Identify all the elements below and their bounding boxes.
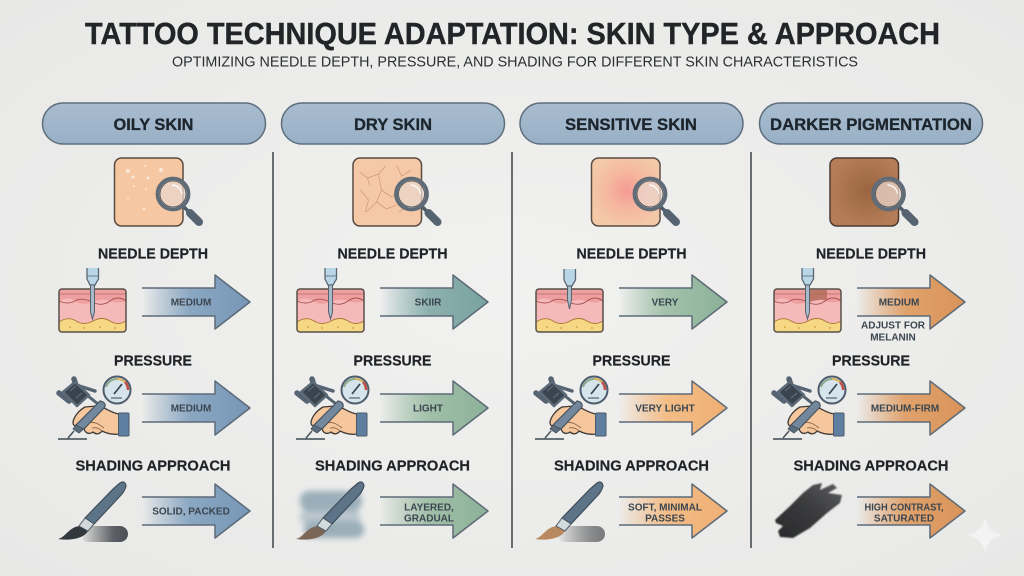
- icon: dry cracked skin under magnifier: [353, 158, 438, 226]
- arrow: medium depth: [857, 275, 965, 329]
- arrow: high contrast saturated: [857, 484, 965, 538]
- icon: brush with light swath: [535, 482, 605, 542]
- icon: dark skin under magnifier: [830, 158, 914, 226]
- arrow: soft minimal passes: SOFT, MINIMAL: [628, 502, 702, 514]
- icon: reddened skin under magnifier: [592, 158, 676, 226]
- note: adjust for melanin: [861, 320, 926, 344]
- arrow: solid packed: SOLID, PACKED: [152, 506, 230, 518]
- note: adjust for melanin: MELANIN: [870, 332, 916, 344]
- icon: oily skin under magnifier: [114, 158, 199, 226]
- icon: tattoo machine and gauge: [773, 376, 846, 439]
- arrow: skin depth: SKIIR: [415, 298, 442, 308]
- arrow: very shallow: [619, 275, 727, 329]
- panel: dry skin: [282, 103, 504, 540]
- icon: needle in skin: [59, 268, 126, 332]
- arrow: high contrast saturated: HIGH CONTRAST,: [864, 502, 944, 514]
- label: needle depth: NEEDLE DEPTH: [576, 246, 686, 262]
- label: pressure: PRESSURE: [592, 352, 670, 370]
- label: needle depth: NEEDLE DEPTH: [338, 246, 448, 262]
- heading: sensitive skin: [520, 103, 743, 144]
- arrow: medium depth: MEDIUM: [879, 298, 919, 308]
- arrow: light pressure: [380, 381, 488, 435]
- icon: brush with layered swath: [296, 482, 364, 540]
- label: needle depth: NEEDLE DEPTH: [816, 246, 926, 262]
- arrow: layered gradual: GRADUAL: [404, 514, 454, 524]
- icon: tattoo machine and gauge: [535, 376, 608, 439]
- icon: shallow needle in skin: [536, 269, 603, 332]
- heading: sensitive skin: SENSITIVE SKIN: [565, 115, 697, 134]
- label: needle depth: NEEDLE DEPTH: [98, 246, 208, 262]
- panel: oily skin: [42, 103, 266, 542]
- heading: dry skin: [282, 103, 504, 144]
- heading: darker pigmentation: DARKER PIGMENTATION: [770, 115, 972, 134]
- icon: sparkle watermark: [967, 517, 1003, 553]
- arrow: skin depth: [380, 275, 488, 329]
- label: pressure: PRESSURE: [354, 352, 432, 370]
- heading: oily skin: OILY SKIN: [114, 115, 194, 134]
- label: shading approach: SHADING APPROACH: [315, 458, 470, 474]
- arrow: high contrast saturated: SATURATED: [874, 514, 934, 524]
- label: shading approach: SHADING APPROACH: [76, 458, 230, 474]
- icon: needle in melanin-rich skin: [774, 268, 841, 332]
- label: shading approach: SHADING APPROACH: [554, 458, 709, 474]
- label: shading approach: SHADING APPROACH: [794, 458, 948, 474]
- arrow: very shallow: VERY: [652, 298, 679, 308]
- arrow: medium pressure: MEDIUM: [171, 404, 211, 414]
- arrow: medium depth: [142, 275, 250, 329]
- subtitle: OPTIMIZING NEEDLE DEPTH, PRESSURE, AND SHADING FOR DIFFERENT SKIN CHARACTERISTICS: [172, 54, 858, 70]
- heading: dry skin: DRY SKIN: [354, 115, 432, 134]
- heading: darker pigmentation: [760, 103, 982, 144]
- label: pressure: PRESSURE: [832, 352, 910, 370]
- icon: tattoo machine and gauge: [296, 376, 368, 439]
- arrow: soft minimal passes: PASSES: [645, 514, 685, 524]
- icon: black saturated stroke: [775, 483, 842, 538]
- arrow: medium depth: MEDIUM: [171, 298, 211, 308]
- label: pressure: PRESSURE: [114, 352, 192, 370]
- title: TATTOO TECHNIQUE ADAPTATION: SKIN TYPE & APPROACH: [85, 16, 940, 51]
- arrow: very light pressure: [619, 381, 727, 435]
- arrow: light pressure: LIGHT: [413, 404, 443, 414]
- heading: oily skin: [42, 103, 266, 144]
- arrow: medium pressure: [142, 381, 250, 435]
- arrow: medium-firm pressure: MEDIUM-FIRM: [871, 404, 939, 414]
- icon: needle in skin: [297, 268, 364, 332]
- note: adjust for melanin: ADJUST FOR: [861, 320, 926, 332]
- arrow: solid packed: [142, 484, 250, 538]
- panel: sensitive skin: [520, 103, 743, 542]
- icon: brush with dark swath: [58, 482, 128, 542]
- arrow: very light pressure: VERY LIGHT: [635, 404, 695, 414]
- arrow: medium-firm pressure: [857, 381, 965, 435]
- arrow: layered gradual: LAYERED,: [404, 502, 454, 514]
- arrow: soft minimal passes: [619, 484, 727, 538]
- panel: darker pigmentation: [760, 103, 982, 538]
- arrow: layered gradual: [380, 484, 488, 538]
- icon: tattoo machine and gauge: [58, 376, 130, 439]
